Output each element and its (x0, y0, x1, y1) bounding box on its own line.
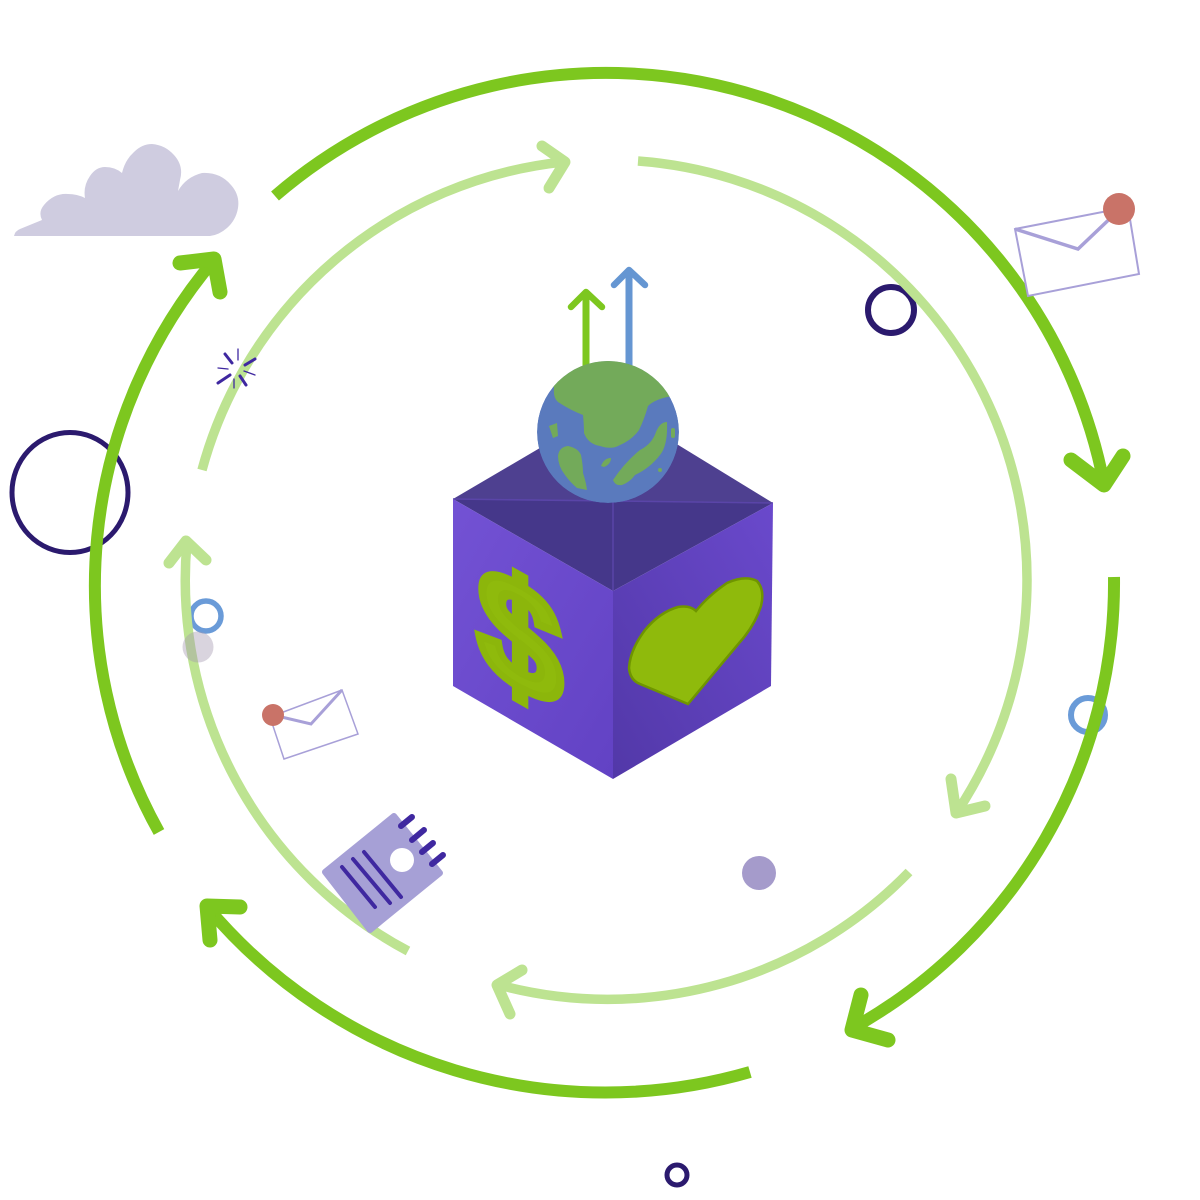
south landmass (558, 446, 587, 490)
outer cycle arrows (95, 73, 1123, 1093)
notebook icon (325, 816, 443, 930)
cube (453, 405, 773, 779)
heart (629, 578, 762, 704)
envelope icon: lower left (262, 690, 358, 759)
inner arrow: bottom (497, 872, 909, 1014)
outer arrow: bottom (207, 906, 750, 1093)
inner arrow: top left (202, 146, 565, 470)
cube right face (613, 503, 773, 779)
green up arrow (571, 292, 602, 372)
gray dot (182, 632, 214, 662)
cube inner (453, 499, 773, 591)
growth arrows (571, 270, 645, 372)
inner cycle arrows (169, 146, 1027, 1014)
navy ring upper right (868, 287, 914, 333)
dollar sign: $ (477, 527, 562, 747)
cloud icon (14, 144, 238, 236)
blue ring left (191, 601, 221, 631)
outer arrow: left (95, 259, 220, 832)
blue ring right (1071, 698, 1105, 732)
blue up arrow (614, 270, 645, 372)
sparkle icon (218, 349, 255, 388)
islands (549, 423, 675, 472)
outer arrow: right (852, 577, 1114, 1040)
east landmass (613, 422, 667, 485)
inner arrow: right (638, 161, 1027, 813)
north landmass (554, 361, 670, 448)
cube left face (453, 499, 613, 779)
outer arrow: top (275, 73, 1123, 485)
small navy ring bottom (667, 1165, 687, 1185)
envelope icon: upper right (1015, 193, 1139, 296)
large navy ring (12, 432, 128, 552)
globe (537, 361, 679, 503)
inner arrow: left (169, 541, 408, 951)
purple dot (742, 856, 776, 890)
cube top back (453, 405, 773, 503)
